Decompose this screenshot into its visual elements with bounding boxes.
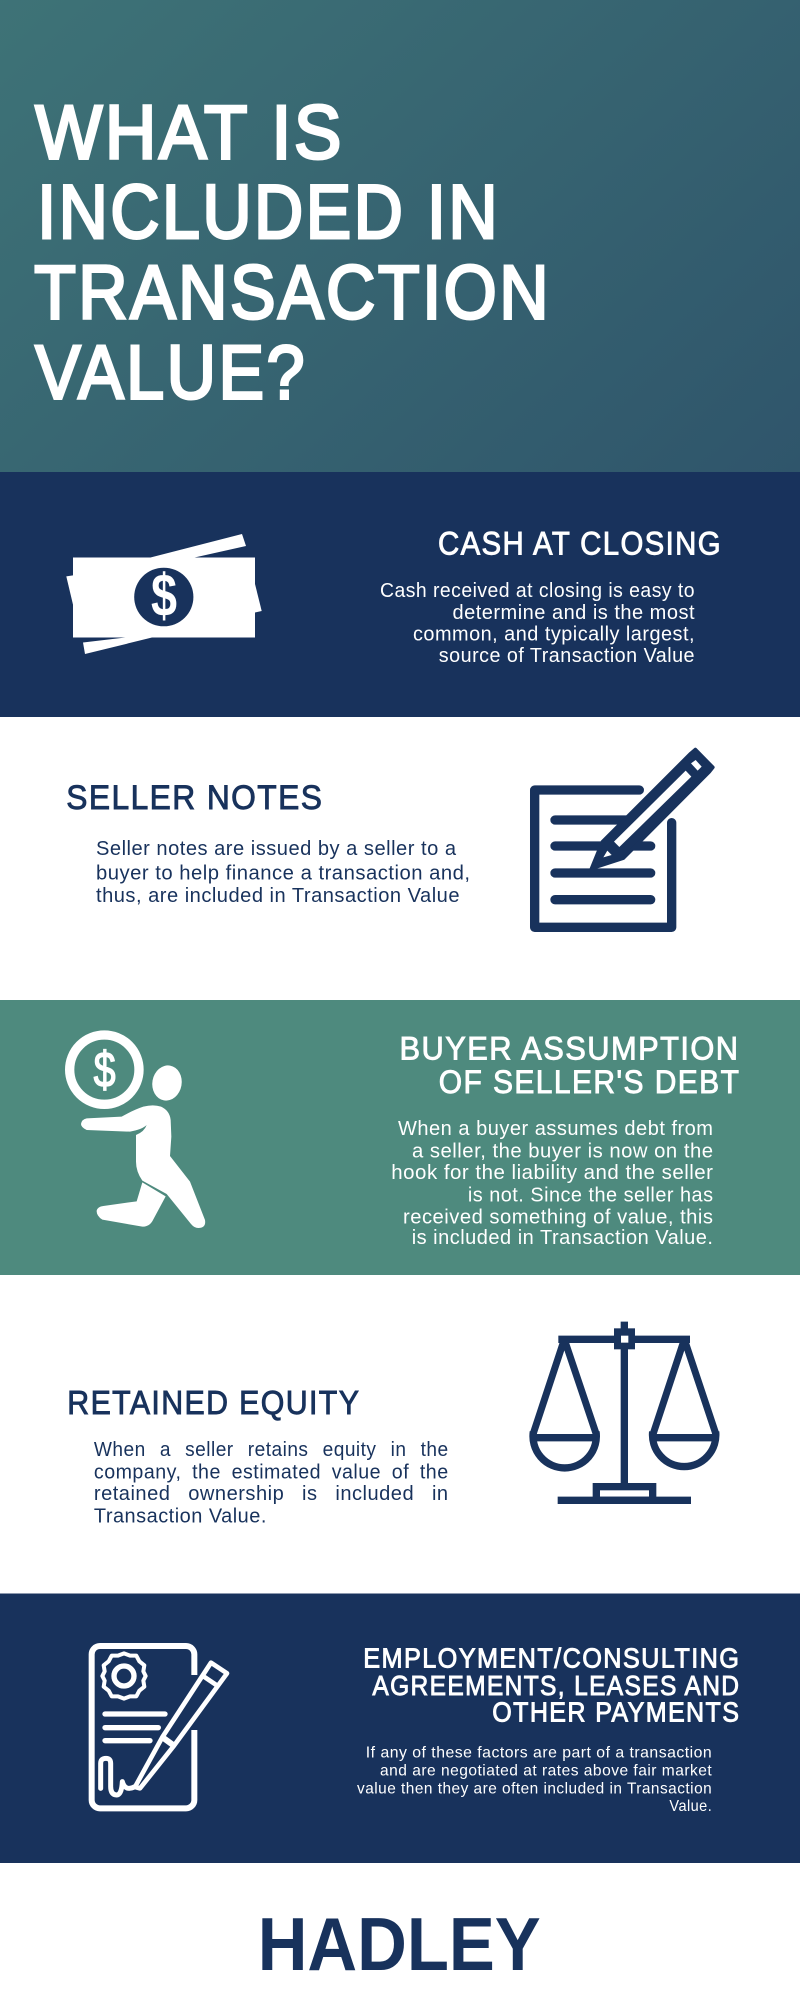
heading: buyer assumption of seller's debt: BUYER ASSUMPTION — [400, 1030, 740, 1066]
panel: buyer assumption of seller's debt — [0, 1000, 800, 1275]
panel: seller notes — [66, 749, 713, 927]
text: seller notes description — [96, 837, 470, 907]
heading: buyer assumption of seller's debt: OF SELLER'S DEBT — [439, 1064, 740, 1100]
icon: person carrying coin: $ — [94, 1042, 116, 1098]
text: seller notes description: thus, are included in Transaction Value — [96, 884, 460, 907]
heading: employment, agreements, leases: OTHER PAYMENTS — [492, 1697, 740, 1728]
text: retained equity description: When a seller retains equity in the — [94, 1438, 449, 1461]
panel: employment and consulting agreements — [0, 1594, 800, 1863]
text: retained equity description: retained ownership is included in — [94, 1482, 449, 1505]
title: WHAT IS — [35, 90, 344, 176]
title: TRANSACTION — [34, 250, 551, 336]
text: retained equity description — [94, 1438, 449, 1527]
title: INCLUDED IN — [37, 170, 500, 255]
icon: signed contract and pen — [92, 1646, 227, 1808]
text: cash at closing description — [380, 579, 695, 667]
text: agreements description: value then they are often included in Transaction — [357, 1780, 712, 1797]
icon: document and pencil — [535, 749, 713, 927]
text: cash at closing description: source of Transaction Value — [439, 644, 695, 667]
heading: buyer assumption of seller's debt — [400, 1030, 740, 1100]
text: buyer assumption description: is included in Transaction Value. — [412, 1226, 714, 1249]
text: cash at closing description: common, and typically largest, — [413, 622, 695, 645]
text: seller notes description: buyer to help finance a transaction and, — [96, 861, 470, 884]
title: VALUE? — [35, 330, 307, 416]
text: cash at closing description: determine and is the most — [452, 601, 695, 624]
panel: hero header — [0, 0, 800, 472]
text: buyer assumption description: When a buyer assumes debt from — [398, 1117, 714, 1140]
heading: cash at closing: CASH AT CLOSING — [438, 526, 722, 562]
heading: employment, agreements, leases — [363, 1643, 740, 1728]
logo: Hadley: HADLEY — [258, 1902, 541, 1986]
text: agreements description: Value. — [669, 1798, 712, 1815]
text: seller notes description: Seller notes are issued by a seller to a — [96, 837, 457, 860]
icon: person carrying coin — [70, 1035, 205, 1228]
title — [34, 90, 551, 416]
text: buyer assumption description: received something of value, this — [403, 1206, 714, 1228]
text: retained equity description: company, the estimated value of the — [94, 1460, 449, 1483]
heading: employment, agreements, leases: AGREEMENTS, LEASES AND — [372, 1670, 740, 1701]
heading: retained equity: RETAINED EQUITY — [67, 1384, 360, 1421]
text: retained equity description: Transaction Value. — [94, 1504, 267, 1527]
text: buyer assumption description — [391, 1117, 714, 1249]
text: buyer assumption description: hook for the liability and the seller — [391, 1161, 714, 1184]
panel: cash at closing — [0, 472, 800, 717]
text: agreements description: If any of these factors are part of a transaction — [366, 1744, 712, 1761]
heading: employment, agreements, leases: EMPLOYMENT/CONSULTING — [363, 1643, 740, 1674]
text: cash at closing description: Cash received at closing is easy to — [380, 579, 695, 602]
icon: banknotes — [66, 534, 262, 654]
icon: balance scales — [533, 1322, 716, 1500]
text: agreements description — [357, 1744, 712, 1815]
heading: seller notes: SELLER NOTES — [66, 779, 323, 817]
icon: banknotes: $ — [151, 562, 177, 629]
text: agreements description: and are negotiated at rates above fair market — [380, 1762, 712, 1779]
text: buyer assumption description: is not. Since the seller has — [468, 1183, 714, 1206]
text: buyer assumption description: a seller, the buyer is now on the — [412, 1139, 714, 1162]
panel: retained equity — [67, 1322, 716, 1527]
